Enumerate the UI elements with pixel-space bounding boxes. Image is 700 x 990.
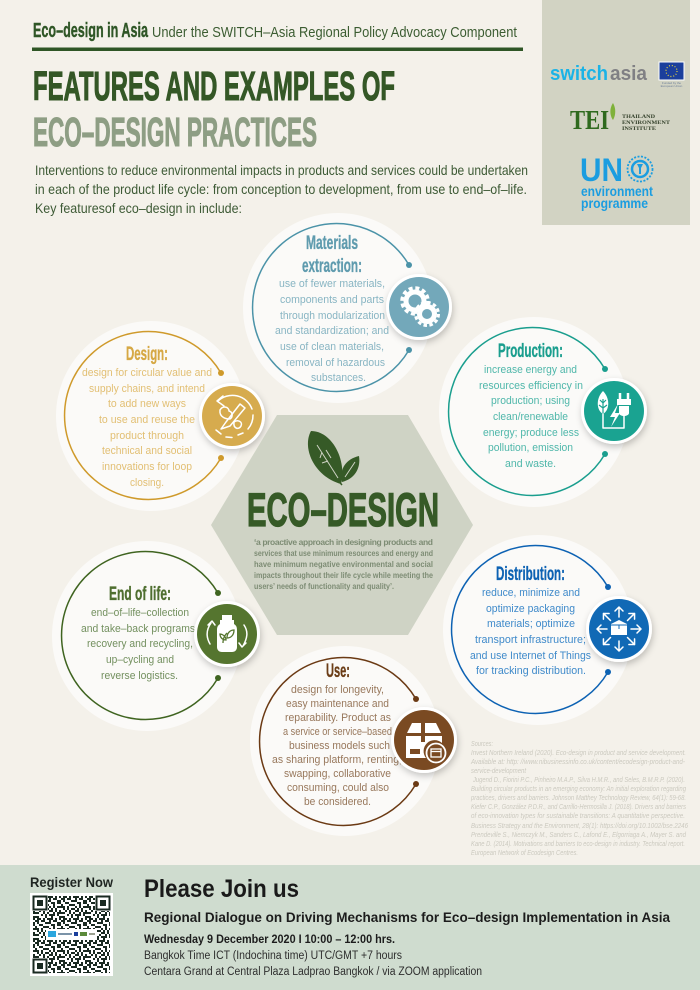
text: end of life: up–cycling and [106,654,174,666]
logo: TEI [570,103,671,135]
panel: use [250,646,457,836]
icon: recycled bottle [194,601,260,667]
logo: EU flag [659,62,684,88]
text: use: consuming, could also [287,782,389,794]
text: end of life [81,607,198,682]
heading: production: Production: [498,341,563,362]
icon: gears [386,274,452,340]
panel: end of life [52,541,260,731]
text: materials extraction: use of clean materials, [280,341,384,353]
header line: Under the SWITCH–Asia Regional Policy Advocacy Component [152,24,518,41]
heading: use: Use: [326,661,350,682]
register label: Register Now [30,874,113,890]
text: use: easy maintenance and [286,698,389,710]
text: design: innovations for loop [102,461,192,473]
event title: Regional Dialogue on Driving Mechanisms for Eco–design Implementation in Asia [144,909,670,925]
intro text: Interventions to reduce environmental impacts in products and services could be undertaken [35,162,528,178]
text: production [479,364,583,470]
heading: materials extraction: extraction: [302,256,362,277]
sources text: service-development [471,768,527,775]
text: distribution: transport infrastructure; [475,634,586,646]
footer band [0,865,700,990]
intro text: Key featuresof eco–design in include: [35,200,242,216]
logo: switch asia [550,63,648,85]
logo: TEI: THAILAND [622,115,655,120]
heading: materials extraction: Materials [306,233,358,254]
logo: UN environment programme: UN [580,152,623,188]
heading: end of life: End of life: [109,584,171,605]
panel: design [56,321,265,511]
text: design: technical and social [102,445,192,457]
text: materials extraction: components and parts [280,294,384,306]
text: definition: ‘a proactive approach in designing products and [254,537,433,547]
event details: Wednesday 9 December 2020 I 10:00 – 12:00 hrs. [144,934,395,946]
text: production: clean/renewable [493,411,568,423]
text: production: production; using [491,395,570,407]
event details: Bangkok Time ICT (Indochina time) UTC/GMT +7 hours [144,950,402,962]
QR code [30,893,113,976]
panel: eco-design hexagon [211,415,473,635]
text: materials extraction: through modularization [280,310,385,322]
heading: design: Design: [126,344,168,365]
text: end of life: reverse logistics. [101,670,178,682]
title: ECO–DESIGN PRACTICES [33,109,317,155]
logo: UN environment programme: environment [581,184,653,199]
text: design: to add new ways [108,398,186,410]
icon: package and calendar [391,707,457,773]
logo: UN environment programme: programme [581,196,648,211]
logo: TEI: TEI [570,105,609,135]
text: definition: services that use minimum resources and energy and [254,548,433,558]
text: distribution: and use Internet of Things [470,650,591,662]
text: design [82,367,212,489]
logo: TEI: ENVIRONMENT [622,121,671,126]
panel: distribution [443,535,652,725]
text: definition: users’ needs of functionality and quality’. [254,581,394,591]
text: use: design for longevity, [291,684,384,696]
panel: production [439,317,647,507]
text: materials extraction [275,278,389,384]
intro text [35,162,528,216]
text: design: product through [110,430,184,442]
text: design: to use and reuse the [99,414,195,426]
logo: switch asia: switch [550,63,608,85]
text: use: be considered. [304,796,371,808]
text: materials extraction: substances. [311,372,366,384]
icon: design cycle [199,383,265,449]
text: use: business models such [289,740,390,752]
text: distribution: optimize packaging [486,603,575,615]
icon: leaf and plug [581,378,647,444]
icon: distribution arrows [586,596,652,662]
text: use: a service or service–based [283,726,392,738]
logo: EU flag: European Union [661,84,683,88]
text: design: supply chains, and intend [89,383,205,395]
text: distribution: materials; optimize [487,618,575,630]
sources text: Sources: [471,741,493,748]
logo: switch asia: asia [610,63,648,85]
text: use: as sharing platform, renting, [272,754,402,766]
sources text: European Network of Ecodesign Centres. [471,850,578,857]
text: end of life: end–of–life–collection [91,607,189,619]
header line: Eco–design in Asia [33,20,149,42]
text: production: resources efficiency in [479,380,583,392]
logo panel [542,0,690,225]
event heading: Please Join us [144,875,299,903]
title: FEATURES AND EXAMPLES OF [33,63,395,109]
text: production: increase energy and [484,364,577,376]
heading: distribution: Distribution: [496,564,565,585]
text: production: and waste. [505,458,556,470]
sources text [470,741,688,857]
icon: leaves [308,431,359,485]
text: definition [254,537,433,591]
text: use [272,684,402,808]
logo: TEI: INSTITUTE [622,127,657,132]
title [33,63,395,155]
header line [32,20,523,51]
text: materials extraction: removal of hazardous [286,357,385,369]
text: distribution: for tracking distribution. [476,665,586,677]
text: use: reparability. Product as [285,712,391,724]
panel: materials extraction [243,213,452,403]
text: definition: impacts throughout their life cycle while meeting the [254,570,433,580]
heading: eco-design: ECO–DESIGN [247,483,439,536]
event details [144,934,482,978]
logo: EU flag: Funded by the [662,81,681,85]
text: definition: have minimum negative environmental and social [254,559,433,569]
text: design: closing. [130,477,164,489]
text: distribution: reduce, minimize and [482,587,580,599]
text: materials extraction: and standardization; and [275,325,389,337]
event details: Centara Grand at Central Plaza Ladprao Bangkok / via ZOOM application [144,966,482,978]
text: end of life: and take–back programs, [81,623,198,635]
text: production: pollution, emission [488,442,573,454]
text: design: design for circular value and [82,367,212,379]
text: distribution [470,587,591,677]
text: use: swapping, collaborative [284,768,391,780]
heading: materials extraction [302,233,362,277]
text: end of life: recovery and recycling, [87,638,193,650]
logo: UN environment programme [580,152,653,211]
text: production: energy; produce less [483,427,579,439]
intro text: in each of the product life cycle: from conception to development, from use to end–of–life. [35,181,527,197]
text: materials extraction: use of fewer materials, [279,278,385,290]
